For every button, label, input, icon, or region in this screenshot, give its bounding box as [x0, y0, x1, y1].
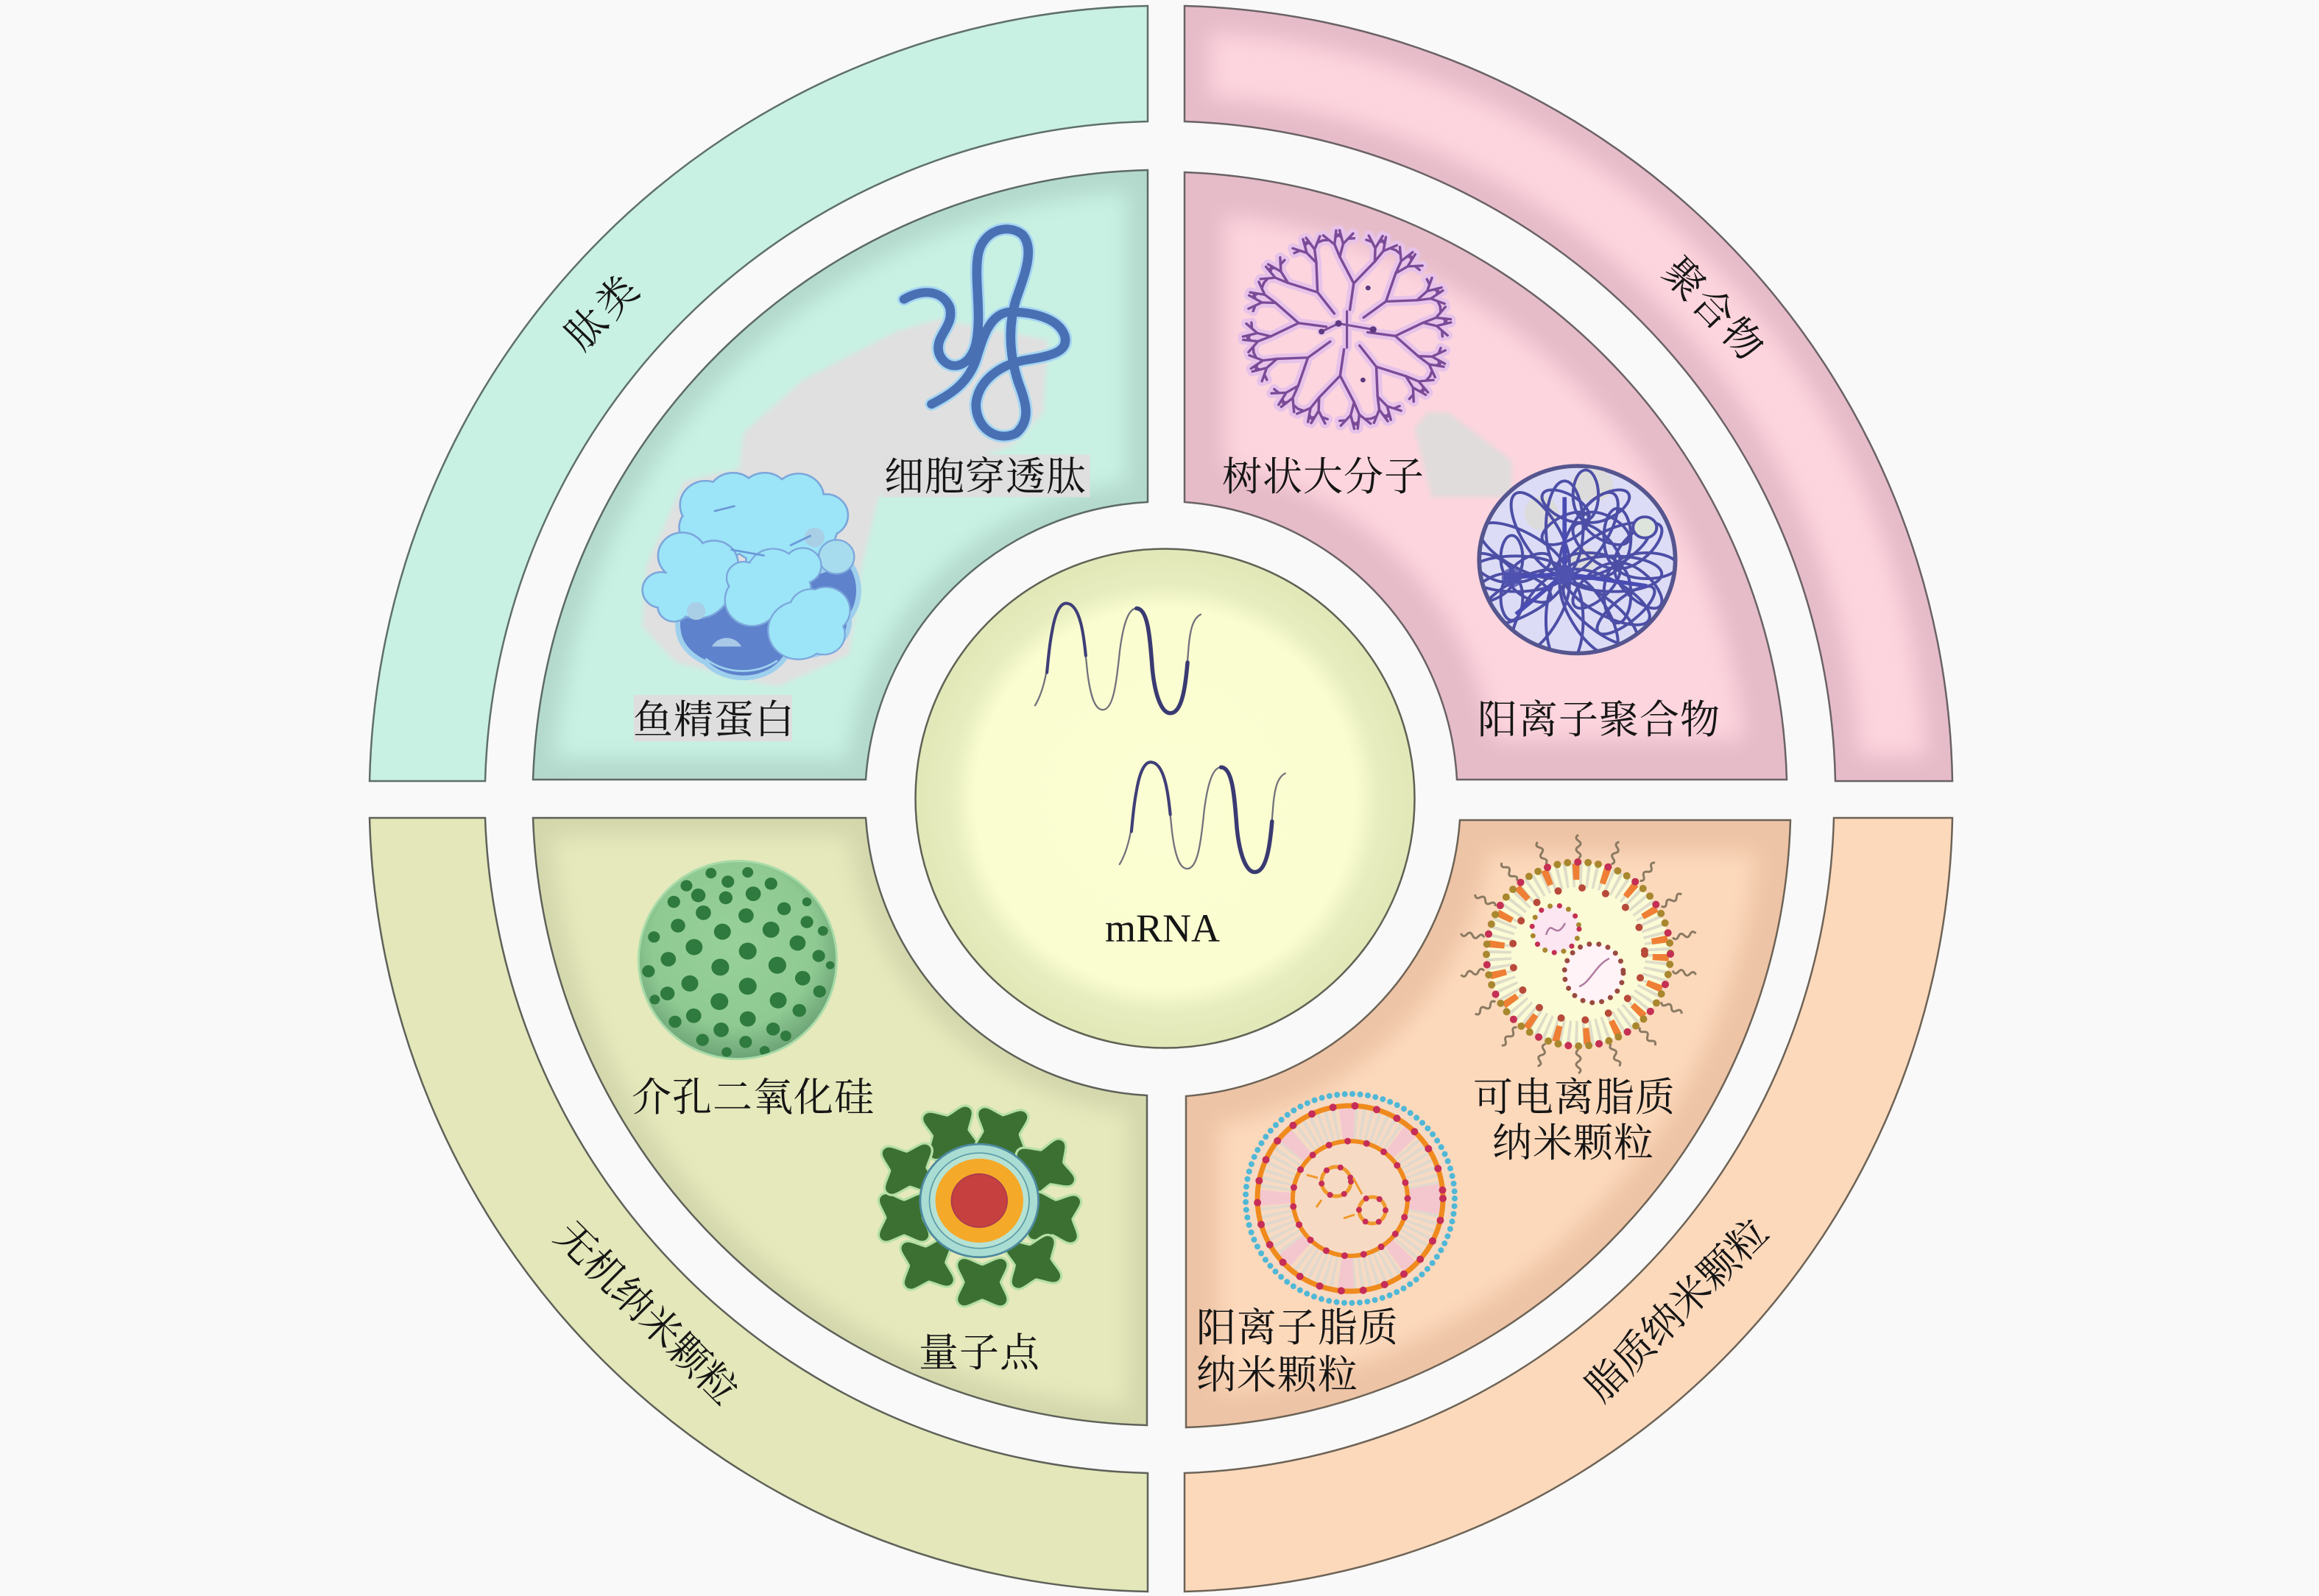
label: cationic lipid nanoparticle: [1196, 1306, 1399, 1397]
label: cationic lipid nanoparticle: 纳米颗粒: [1196, 1353, 1358, 1397]
label: polymers: 聚合物: [1654, 250, 1773, 370]
panel: outer ring inorganic nanoparticles: [370, 818, 1148, 1592]
icon: quantum dot: [858, 1088, 1101, 1327]
label: ionizable lipid nanoparticle: 可电离脂质: [1473, 1076, 1676, 1120]
panel: outer ring lipid nanoparticles: [1185, 818, 1952, 1592]
label: peptides: 肽类: [557, 264, 650, 359]
icon: cell penetrating peptide: [904, 229, 1065, 436]
panel: inorganic carriers: [533, 818, 1147, 1425]
icon: ionizable lipid nanoparticle: [1461, 835, 1696, 1073]
panel: peptide carriers: [533, 170, 1148, 780]
label: mRNA: mRNA: [1105, 906, 1220, 950]
label: cell penetrating peptide: 细胞穿透肽: [884, 455, 1087, 499]
label: dendrimer: 树状大分子: [1222, 455, 1425, 499]
icon: dendrimer: [1240, 227, 1454, 431]
label: ionizable lipid nanoparticle: [1473, 1076, 1676, 1165]
label: ionizable lipid nanoparticle: 纳米颗粒: [1492, 1121, 1654, 1165]
label: cationic lipid nanoparticle: 阳离子脂质: [1196, 1306, 1399, 1350]
panel: outer ring peptides: [370, 6, 1148, 781]
label: inorganic nanoparticles: 无机纳米颗粒: [546, 1213, 746, 1413]
label: protamine: 鱼精蛋白: [633, 698, 795, 742]
icon: protamine: [643, 473, 858, 678]
panel: centre mRNA circle: [916, 549, 1415, 1048]
label: mesoporous silica: 介孔二氧化硅: [632, 1076, 875, 1120]
icon: cationic lipid nanoparticle: [1246, 1094, 1455, 1303]
icon: cationic polymer: [1467, 466, 1677, 667]
panel: lipid carriers: [1186, 820, 1790, 1427]
panel: polymer carriers: [1185, 172, 1787, 780]
label: cationic polymer: 阳离子聚合物: [1478, 698, 1720, 742]
label: lipid nanoparticles: 脂质纳米颗粒: [1577, 1210, 1777, 1410]
icon: mesoporous silica sphere: [638, 860, 838, 1060]
panel: outer ring polymers: [1185, 6, 1952, 781]
label: quantum dot: 量子点: [919, 1331, 1040, 1375]
icon: mRNA strands: [1035, 604, 1285, 872]
